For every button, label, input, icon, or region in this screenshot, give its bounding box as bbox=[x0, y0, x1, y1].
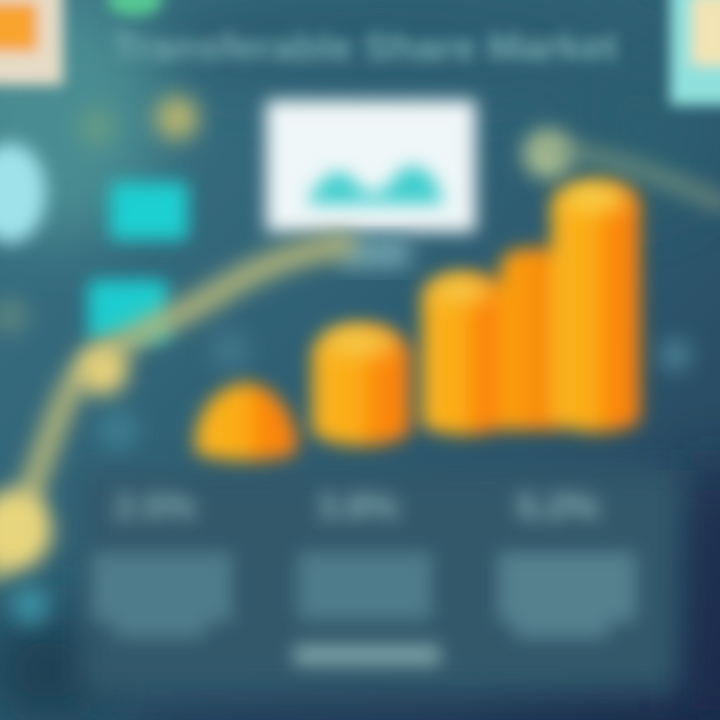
icon: cyan square lower bbox=[88, 280, 168, 340]
column: left stat: 2.5% bbox=[114, 486, 196, 527]
bar 5 bbox=[551, 182, 640, 432]
column: right stat: 5.2% bbox=[517, 486, 599, 527]
bar 3 bbox=[422, 274, 506, 435]
panel: lower dark card bbox=[82, 470, 678, 692]
trend markers bbox=[0, 345, 128, 570]
icon: small olive dots bbox=[0, 96, 691, 625]
icon: top right card bbox=[670, 0, 720, 105]
bar 1 bbox=[195, 383, 297, 460]
icon: top green blob bbox=[107, 0, 163, 16]
bar 2 bbox=[312, 326, 410, 446]
icon: left cyan cloud bbox=[0, 143, 46, 243]
column: right stat bbox=[498, 486, 636, 638]
bar highlights bbox=[324, 185, 627, 356]
chart card: white panel with mini area chart bbox=[266, 100, 476, 268]
icon: top left orange note bbox=[0, 0, 63, 85]
column text lines bbox=[498, 552, 636, 638]
column: left stat bbox=[92, 486, 232, 638]
column text lines bbox=[92, 552, 232, 638]
column: middle stat bbox=[294, 486, 440, 665]
icon: cyan square upper bbox=[110, 182, 188, 240]
column text lines bbox=[294, 552, 440, 665]
bar chart bbox=[195, 182, 640, 460]
column: middle stat: 3.8% bbox=[317, 486, 399, 527]
bar 4 bbox=[500, 248, 562, 430]
trend line bbox=[0, 150, 720, 570]
title: Transferable Share Market bbox=[112, 27, 618, 69]
